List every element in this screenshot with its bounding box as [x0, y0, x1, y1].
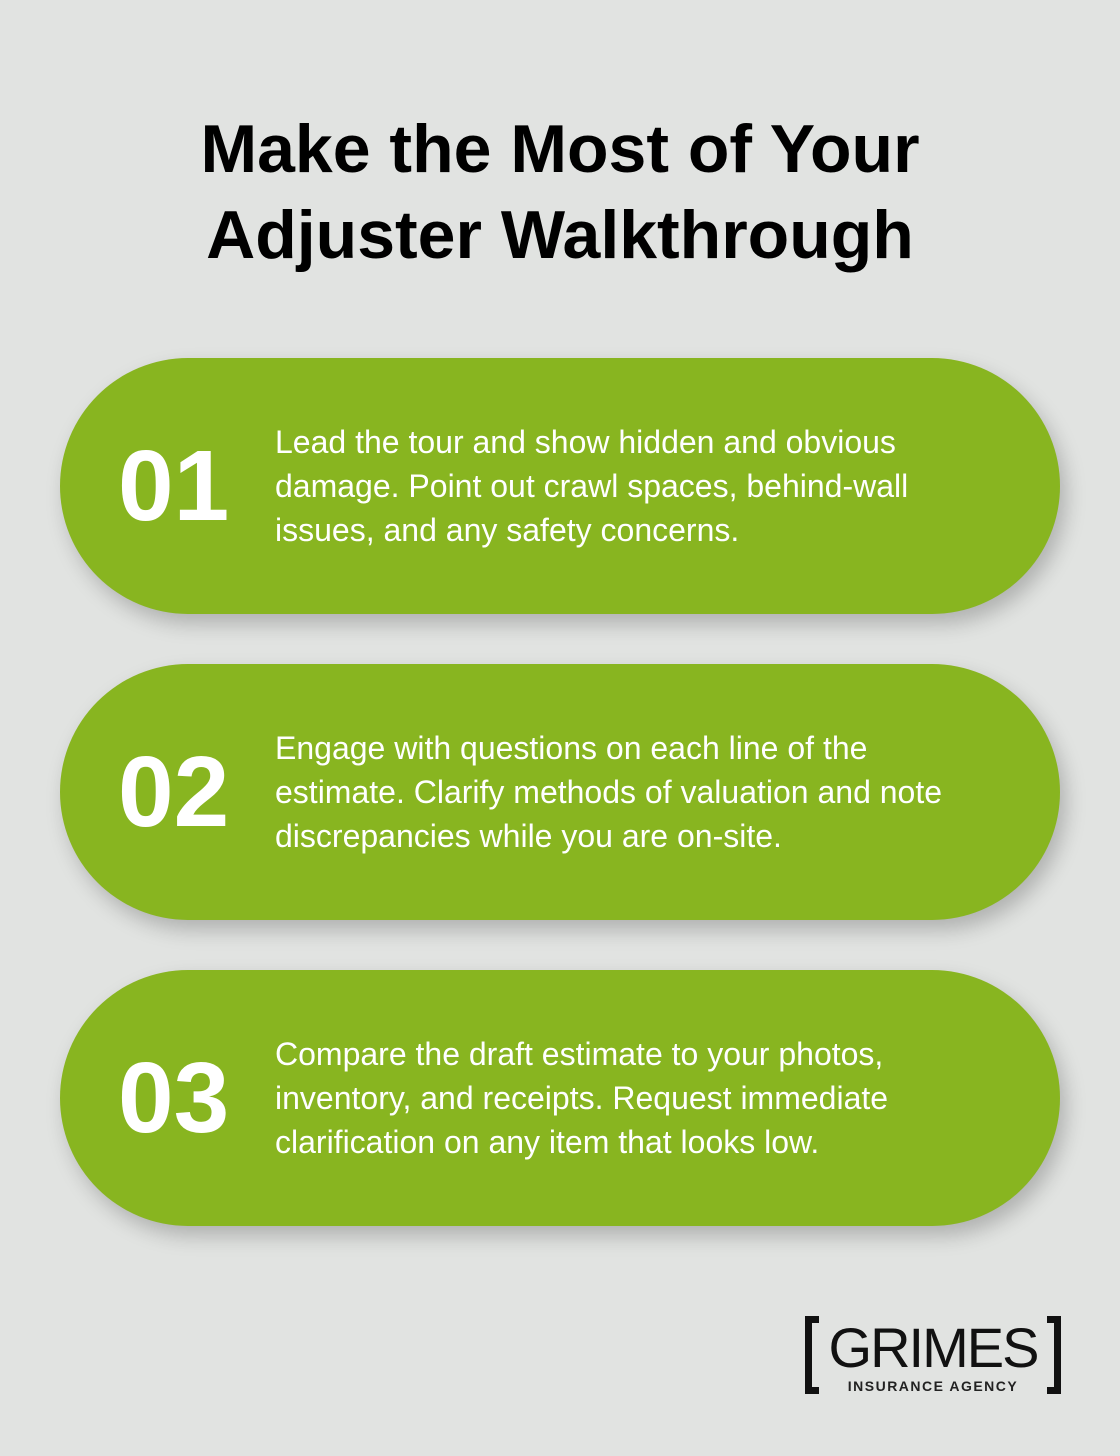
number 01: 01	[118, 430, 229, 542]
title: Adjuster Walkthrough	[206, 197, 914, 273]
logo: INSURANCE AGENCY	[848, 1378, 1018, 1394]
text 02: Engage with questions on each line of the estimate. Clarify methods of valuation and note discrepancies while you are on-site.	[275, 730, 942, 854]
card 03	[60, 970, 1060, 1226]
text 01: Lead the tour and show hidden and obvious damage. Point out crawl spaces, behind-wall issues, and any safety concerns.	[275, 424, 908, 548]
logo: GRIMES	[829, 1316, 1037, 1379]
number 02: 02	[118, 736, 229, 848]
card 01	[60, 358, 1060, 614]
card 02	[60, 664, 1060, 920]
logo	[805, 1316, 1061, 1394]
text 03: Compare the draft estimate to your photos, inventory, and receipts. Request immediate clarification on any item that looks low.	[275, 1036, 888, 1160]
title: Make the Most of Your	[200, 111, 920, 187]
title	[200, 111, 920, 273]
number 03: 03	[118, 1042, 229, 1154]
